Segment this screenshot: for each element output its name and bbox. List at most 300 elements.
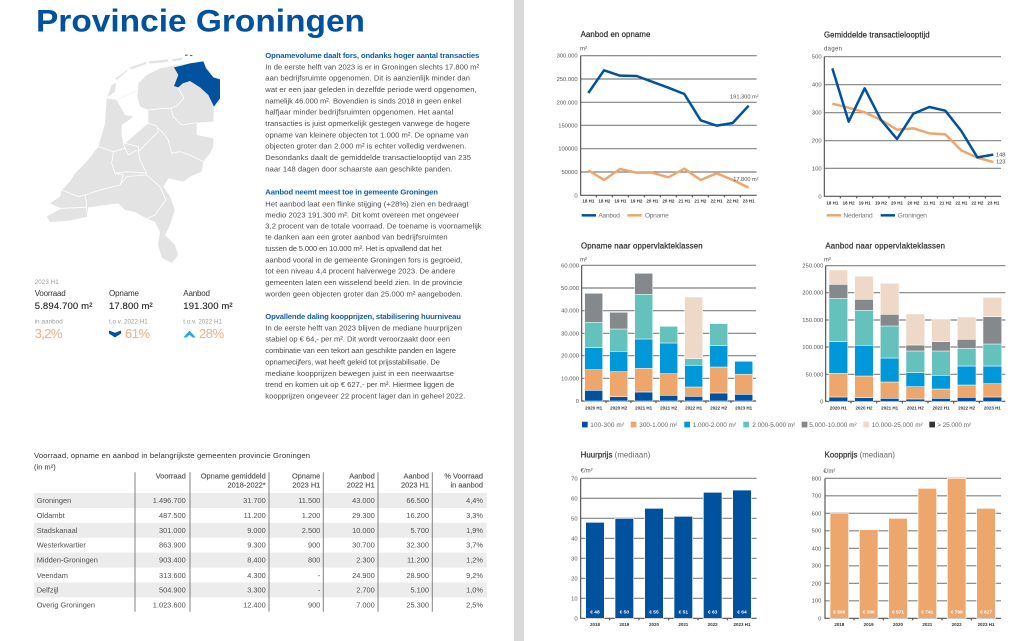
bar value labels: € 63 bbox=[708, 609, 718, 615]
row: Delfzijl bbox=[37, 586, 483, 595]
table header: 2023 H1 bbox=[401, 480, 429, 490]
map: national silhouette bbox=[47, 61, 220, 263]
bar value labels: € 598 bbox=[833, 609, 846, 615]
row: Westerkwartier bbox=[37, 541, 483, 550]
row: Overig Groningen: 25.300 bbox=[406, 601, 429, 610]
table header bbox=[156, 472, 483, 490]
row: Delfzijl: Delfzijl bbox=[37, 586, 59, 595]
y labels: 0 bbox=[820, 399, 824, 405]
section: aanbod: aanbod vooral in de gemeente Groningen fors is gegroeid, bbox=[265, 255, 462, 264]
kpi: opname: Opname bbox=[109, 289, 140, 298]
unit: €/m² bbox=[581, 468, 593, 474]
chart title: Opname naar oppervlakteklassen bbox=[581, 241, 703, 250]
x labels: 2019 bbox=[619, 622, 630, 627]
segment 1000-2000 bbox=[829, 342, 1002, 389]
x labels: 2021 bbox=[922, 622, 933, 627]
section: opnamevolume: In de eerste helft van 2023 is er in Groningen slechts 17.800 m² bbox=[265, 62, 479, 71]
section: aanbod bbox=[264, 188, 482, 299]
kpi: voorraad: 3,2% bbox=[35, 326, 63, 341]
row: Groningen: Groningen bbox=[37, 496, 71, 505]
section: opnamevolume: opname van kleinere objecten tot 1.000 m². De opname van bbox=[265, 130, 469, 139]
bars bbox=[829, 270, 1002, 401]
section: opnamevolume: naar 148 dagen door schaarste aan geschikte panden. bbox=[265, 164, 452, 173]
line: opname bbox=[588, 169, 749, 188]
row: Overig Groningen: 12.400 bbox=[243, 601, 266, 610]
legend: 5000-10000: 5.000-10.000 m² bbox=[809, 422, 857, 429]
x labels: 19 H2 bbox=[875, 200, 887, 205]
legend: 100-300: 100-300 m² bbox=[590, 422, 624, 429]
y labels: 50000 bbox=[561, 170, 578, 176]
row: Groningen: 66.500 bbox=[406, 496, 429, 505]
y labels: 40.000 bbox=[561, 309, 580, 315]
row: Oldambt: 16.200 bbox=[406, 511, 429, 520]
x labels: 19 H2 bbox=[630, 198, 643, 203]
map of the Netherlands bbox=[47, 54, 220, 263]
line: aanbod bbox=[588, 70, 749, 126]
unit: m² bbox=[824, 257, 831, 263]
y labels: 250.000 bbox=[557, 77, 578, 83]
kpi: opname: 61% bbox=[125, 326, 150, 341]
y labels: 500 bbox=[812, 55, 822, 61]
x labels: 2021 H2 bbox=[660, 406, 678, 411]
x labels bbox=[590, 622, 751, 627]
segment 300-1000 bbox=[829, 373, 1002, 399]
unit: m² bbox=[580, 257, 587, 263]
row: Westerkwartier: 9.300 bbox=[247, 541, 266, 550]
y labels: 200.000 bbox=[557, 100, 578, 106]
row: Stadskanaal: Stadskanaal bbox=[37, 526, 78, 535]
y labels: 700 bbox=[812, 494, 822, 500]
row: Oldambt: 29.300 bbox=[352, 511, 375, 520]
section: aanbod: Het aanbod laat een flinke stijging (+28%) zien en bedraagt bbox=[265, 199, 469, 208]
y labels: 0 bbox=[576, 399, 580, 405]
y labels: 150.000 bbox=[802, 318, 824, 324]
kpi: voorraad: 5.894.700 m² bbox=[35, 301, 92, 312]
line chart: gemiddelde transactielooptijd bbox=[812, 31, 1005, 219]
y labels bbox=[561, 263, 580, 405]
section: prijzen: Opvallende daling koopprijzen, stabilisering huurniveau bbox=[265, 312, 461, 321]
bar chart: koopprijs bbox=[812, 451, 1001, 627]
row: Oldambt: 1.200 bbox=[302, 511, 320, 520]
body text column bbox=[264, 51, 482, 400]
legend: 300-1000: 300-1.000 m² bbox=[639, 422, 677, 429]
x labels: 2020 bbox=[649, 622, 659, 627]
row: Veendam: 313.600 bbox=[159, 571, 186, 580]
y labels: 10 bbox=[571, 596, 578, 602]
y labels: 50 bbox=[571, 516, 578, 522]
unit: dagen bbox=[824, 46, 842, 52]
x labels: 2023 H1 bbox=[978, 622, 995, 627]
section: aanbod: te danken aan een groter aanbod van bedrijfsruimten bbox=[265, 233, 448, 242]
section: aanbod: tussen de 5.000 en 10.000 m². Het is opvallend dat het bbox=[265, 244, 442, 253]
bar value labels bbox=[833, 609, 992, 615]
row: Oldambt: 11.200 bbox=[244, 511, 266, 520]
segment 5000-10000 bbox=[829, 284, 1002, 351]
y labels: 20.000 bbox=[561, 354, 580, 360]
x labels: 22 H1 bbox=[711, 198, 723, 203]
row: Westerkwartier: 863.900 bbox=[159, 541, 186, 550]
section: prijzen: combinatie van een tekort aan geschikte panden en lagere bbox=[265, 346, 456, 355]
axes bbox=[581, 478, 757, 620]
segment 100-300 bbox=[585, 390, 753, 401]
x labels: 2021 H2 bbox=[907, 406, 924, 411]
y labels: 300.000 bbox=[557, 54, 578, 60]
bar value labels: € 48 bbox=[590, 609, 600, 615]
row: Midden-Groningen: 8.400 bbox=[247, 556, 266, 565]
section: aanbod: 3,2 procent van de totale voorraad. De toename is voornamelijk bbox=[265, 221, 482, 230]
table row stripes bbox=[34, 493, 487, 597]
bar value labels: € 64 bbox=[737, 609, 747, 615]
segment 10000-25000 bbox=[685, 297, 703, 359]
x labels: 20 H2 bbox=[907, 200, 920, 205]
kpi: aanbod: 28% bbox=[199, 326, 224, 341]
row: Oldambt: Oldambt bbox=[37, 511, 65, 520]
section: aanbod: gemeenten laten een wisselend beeld zien. In de provincie bbox=[265, 278, 462, 287]
x labels: 20 H1 bbox=[646, 198, 659, 203]
bars bbox=[830, 478, 995, 618]
table header: % Voorraad bbox=[444, 472, 483, 480]
x labels: 22 H2 bbox=[971, 200, 984, 205]
x labels: 2020 H1 bbox=[830, 406, 847, 411]
axes bbox=[825, 478, 1001, 620]
y labels: 60.000 bbox=[561, 263, 580, 269]
icon: chevron up bbox=[183, 330, 196, 338]
y labels: 0 bbox=[818, 194, 822, 200]
table bbox=[34, 451, 487, 612]
section: opnamevolume bbox=[264, 51, 479, 173]
grid lines bbox=[581, 56, 757, 172]
row: Veendam: 4.300 bbox=[247, 571, 266, 580]
y labels: 250.000 bbox=[802, 264, 824, 270]
bar value labels: € 571 bbox=[892, 609, 904, 615]
segment 100-300 bbox=[829, 397, 1002, 401]
section: aanbod: worden geen objecten groter dan 25.000 m² aangeboden. bbox=[264, 290, 463, 299]
y labels: 100.000 bbox=[802, 345, 824, 351]
kpi: aanbod bbox=[183, 289, 233, 341]
row: Oldambt bbox=[37, 511, 483, 520]
bar value labels: € 51 bbox=[679, 609, 688, 615]
period label: 2023 H1 bbox=[35, 279, 59, 286]
legend bbox=[827, 212, 927, 219]
table title: Voorraad, opname en aanbod in belangrijkste gemeenten provincie Groningen bbox=[34, 451, 310, 460]
row: Stadskanaal: 301.000 bbox=[159, 526, 186, 535]
table header: Aanbod bbox=[404, 472, 429, 480]
bar chart: huurprijs bbox=[571, 451, 757, 627]
x labels: 18 H2 bbox=[598, 198, 611, 203]
line: nederland bbox=[832, 104, 993, 162]
shared legend oppervlakteklassen bbox=[582, 422, 971, 429]
legend: Nederland bbox=[843, 212, 873, 219]
y labels: 400 bbox=[812, 83, 822, 89]
kpi: aanbod: Aanbod bbox=[183, 289, 210, 298]
section: opnamevolume: namelijk 46.000 m². Bovendien is sinds 2018 in geen enkel bbox=[265, 96, 462, 105]
table column rules bbox=[135, 472, 432, 612]
section: opnamevolume: Opnamevolume daalt fors, ondanks hoger aantal transacties bbox=[265, 51, 479, 60]
row: Delfzijl: 504.900 bbox=[159, 586, 186, 595]
legend: 2000-5000: 2.000-5.000 m² bbox=[752, 422, 795, 429]
row: Midden-Groningen: 11.200 bbox=[407, 556, 429, 565]
row: Overig Groningen: Overig Groningen bbox=[37, 601, 95, 610]
row: Veendam: 28.900 bbox=[406, 571, 429, 580]
y labels: 0 bbox=[574, 193, 578, 199]
y labels bbox=[557, 54, 578, 199]
value label groningen: 148 bbox=[996, 152, 1005, 158]
x labels: 23 H1 bbox=[743, 198, 755, 203]
axes bbox=[581, 56, 757, 197]
chart title: Huurprijs (mediaan) bbox=[581, 451, 651, 460]
chart title: Gemiddelde transactielooptijd bbox=[824, 31, 930, 40]
section: aanbod: Aanbod neemt meest toe in gemeente Groningen bbox=[265, 188, 438, 197]
section: prijzen: opnamecijfers, wat heeft geleid tot prijsstabilisatie. De bbox=[265, 358, 440, 367]
section: opnamevolume: Desondanks daalt de gemiddelde transactielooptijd van 235 bbox=[265, 153, 471, 162]
row: Westerkwartier: 3,7% bbox=[466, 541, 483, 550]
row: Stadskanaal: 9.000 bbox=[247, 526, 266, 535]
row: Overig Groningen: 1.023.600 bbox=[153, 601, 186, 610]
table header: Opname gemiddeld bbox=[201, 472, 266, 480]
x labels: 2020 H2 bbox=[610, 406, 628, 411]
y labels: 500 bbox=[812, 529, 822, 535]
map: province borders bbox=[62, 88, 203, 219]
kpi: aanbod: 191.300 m² bbox=[183, 301, 233, 312]
x labels: 21 H1 bbox=[678, 198, 691, 203]
x labels: 18 H1 bbox=[582, 198, 595, 203]
table header: Voorraad bbox=[156, 472, 186, 480]
legend: 1000-2000: 1.000-2.000 m² bbox=[693, 422, 736, 429]
section: prijzen: mediane koopprijzen bewegen juist in een neerwaartse bbox=[265, 369, 454, 378]
value label opname: 17.800 m² bbox=[733, 177, 759, 183]
x labels: 22 H1 bbox=[955, 200, 968, 205]
section: prijzen: trend en komen uit op € 627,- per m². Hiermee liggen de bbox=[265, 380, 454, 389]
legend: Aanbod bbox=[598, 212, 620, 219]
bar value labels bbox=[590, 609, 747, 615]
x labels: 2018 bbox=[590, 622, 600, 627]
x labels: 21 H2 bbox=[939, 200, 952, 205]
icon: chevron down bbox=[109, 330, 121, 338]
section: opnamevolume: transacties is juist opmerkelijk gestegen vanwege de hogere bbox=[265, 119, 470, 128]
bar value labels: € 55 bbox=[649, 609, 659, 615]
y labels: 100 bbox=[812, 599, 822, 605]
legend: above 25000: > 25.000 m² bbox=[937, 422, 971, 429]
row: Delfzijl: 5.100 bbox=[410, 586, 429, 595]
x labels: 21 H1 bbox=[923, 200, 936, 205]
legend: Groningen bbox=[898, 212, 927, 219]
chart title: Aanbod naar oppervlakteklassen bbox=[825, 241, 945, 250]
y labels bbox=[812, 55, 822, 200]
section: opnamevolume: wat er een jaar geleden in dezelfde periode werd opgenomen, bbox=[264, 85, 477, 94]
legend: Opname bbox=[645, 212, 669, 219]
x labels: 2022 H1 bbox=[685, 406, 703, 411]
kpi: opname bbox=[109, 289, 153, 341]
row: Overig Groningen: 7.000 bbox=[356, 601, 375, 610]
row: Stadskanaal bbox=[37, 526, 483, 535]
section: prijzen: In de eerste helft van 2023 blijven de mediane huurprijzen bbox=[265, 323, 462, 332]
y labels: 400 bbox=[812, 546, 822, 552]
row: Overig Groningen: 2,5% bbox=[466, 601, 483, 610]
x labels: 19 H1 bbox=[859, 200, 871, 205]
x labels: 2023 H1 bbox=[984, 406, 1001, 411]
x labels bbox=[582, 198, 755, 203]
kpi: opname: t.o.v. 2022 H1 bbox=[109, 318, 148, 326]
line chart: aanbod en opname bbox=[557, 30, 759, 219]
x labels: 2021 bbox=[678, 622, 689, 627]
y labels bbox=[571, 476, 578, 622]
x labels: 18 H1 bbox=[826, 200, 839, 205]
section: opnamevolume: objecten groter dan 2.000 m² is echter volledig verdwenen. bbox=[265, 142, 466, 151]
bars bbox=[585, 273, 753, 401]
grid lines bbox=[826, 266, 1005, 374]
section: prijzen: stabiel op € 64,- per m². Dit wordt veroorzaakt door een bbox=[265, 335, 450, 344]
section: opnamevolume: aan bedrijfsruimte opgenomen. Dit is aanzienlijk minder dan bbox=[265, 74, 470, 83]
row: Oldambt: 3,3% bbox=[466, 511, 483, 520]
row: Oldambt: 487.500 bbox=[159, 511, 186, 520]
row: Stadskanaal: 2.500 bbox=[302, 526, 320, 535]
y labels: 0 bbox=[818, 616, 822, 622]
x labels: 2018 bbox=[834, 622, 845, 627]
bar value labels: € 506 bbox=[863, 609, 875, 615]
bar value labels: € 50 bbox=[620, 609, 629, 615]
row: Veendam: 9,2% bbox=[466, 571, 483, 580]
x labels: 2022 bbox=[952, 622, 962, 627]
kpi: voorraad: in aanbod bbox=[35, 318, 63, 326]
y labels: 200.000 bbox=[802, 291, 824, 297]
segment 10000-25000 bbox=[829, 270, 1002, 345]
title: Provincie Groningen bbox=[36, 3, 365, 39]
table header: Aanbod bbox=[349, 472, 375, 480]
axes bbox=[582, 265, 756, 403]
stacked bar chart: aanbod naar oppervlakteklassen bbox=[802, 241, 1005, 411]
y labels: 30 bbox=[571, 556, 578, 562]
y labels: 100 bbox=[812, 166, 822, 172]
map: afsluitdijk bbox=[117, 90, 137, 100]
row: Midden-Groningen: 2.300 bbox=[356, 556, 375, 565]
x labels: 18 H2 bbox=[843, 200, 855, 205]
kpi: aanbod: t.o.v. 2022 H1 bbox=[183, 318, 223, 326]
y labels: 200 bbox=[812, 581, 822, 587]
row: Delfzijl: 3.300 bbox=[247, 586, 266, 595]
row: Overig Groningen: 900 bbox=[308, 601, 320, 610]
x labels: 2021 H1 bbox=[635, 406, 653, 411]
row: Groningen: 11.500 bbox=[298, 496, 320, 505]
segment 5000-10000 bbox=[585, 273, 653, 329]
x labels: 2023 H1 bbox=[734, 622, 751, 627]
x labels: 2022 H1 bbox=[933, 406, 950, 411]
grid lines bbox=[582, 265, 756, 378]
row: Groningen bbox=[37, 496, 483, 505]
value label aanbod: 191.300 m² bbox=[730, 94, 759, 100]
section: aanbod: tot een niveau 4,4 procent halverwege 2023. De andere bbox=[265, 267, 455, 276]
x labels: 2020 H2 bbox=[856, 406, 873, 411]
row: Groningen: 1.496.700 bbox=[153, 496, 186, 505]
row: Veendam: Veendam bbox=[37, 571, 68, 580]
y labels: 10.000 bbox=[561, 376, 580, 382]
row: Midden-Groningen: 800 bbox=[308, 556, 320, 565]
row: Westerkwartier: Westerkwartier bbox=[37, 541, 86, 550]
x labels: 2020 H1 bbox=[585, 406, 603, 411]
map: Groningen highlighted bbox=[174, 54, 220, 107]
row: Delfzijl: 1,0% bbox=[466, 586, 483, 595]
axes bbox=[824, 57, 1001, 198]
row: Delfzijl: 2.700 bbox=[356, 586, 375, 595]
row: Groningen: 31.700 bbox=[243, 496, 266, 505]
row: Midden-Groningen: 903.400 bbox=[159, 556, 186, 565]
kpi: voorraad bbox=[35, 289, 92, 341]
chart title: Koopprijs (mediaan) bbox=[825, 451, 895, 460]
x labels: 22 H2 bbox=[727, 198, 739, 203]
x labels: 23 H1 bbox=[987, 200, 1000, 205]
y labels: 60 bbox=[571, 496, 578, 502]
grid lines bbox=[824, 57, 1001, 168]
section: prijzen bbox=[265, 312, 465, 400]
legend bbox=[582, 212, 669, 219]
row: Overig Groningen bbox=[37, 601, 483, 610]
y labels: 600 bbox=[812, 511, 822, 517]
y labels: 50.000 bbox=[561, 286, 580, 292]
grid lines bbox=[825, 478, 1001, 601]
segment 2000-5000 bbox=[585, 294, 728, 365]
y labels: 200 bbox=[812, 139, 822, 145]
row: Midden-Groningen: 1,2% bbox=[466, 556, 483, 565]
x labels: 2022 bbox=[708, 622, 718, 627]
y labels bbox=[812, 476, 822, 622]
grid lines bbox=[581, 478, 757, 598]
table header: in aanbod bbox=[451, 480, 483, 490]
x labels: 20 H2 bbox=[662, 198, 675, 203]
row: Veendam bbox=[37, 571, 483, 580]
table header: 2018-2022* bbox=[227, 480, 266, 490]
y labels: 100000 bbox=[558, 147, 578, 153]
y labels: 50.000 bbox=[806, 372, 824, 378]
key figures bbox=[35, 279, 233, 341]
row: Veendam: - bbox=[318, 571, 321, 580]
y labels bbox=[802, 264, 824, 405]
bar value labels: € 741 bbox=[921, 609, 934, 615]
row: Westerkwartier: 32.300 bbox=[406, 541, 429, 550]
y labels: 150000 bbox=[558, 123, 578, 129]
x labels bbox=[834, 622, 995, 627]
x labels bbox=[830, 406, 1001, 411]
row: Groningen: 43.000 bbox=[352, 496, 375, 505]
stacked bar chart: opname naar oppervlakteklassen bbox=[561, 241, 756, 411]
section: opnamevolume: halfjaar minder bedrijfsruimten opgenomen. Het aantal bbox=[265, 108, 454, 117]
kpi: opname: 17.800 m² bbox=[109, 301, 153, 312]
y labels: 0 bbox=[574, 616, 578, 622]
y labels: 300 bbox=[812, 564, 822, 570]
bar value labels: € 627 bbox=[980, 609, 992, 615]
segment 300-1000 bbox=[585, 367, 753, 397]
row: Westerkwartier: 900 bbox=[308, 541, 320, 550]
y labels: 800 bbox=[812, 476, 822, 482]
map: Wadden islands bbox=[107, 57, 183, 97]
x labels: 21 H2 bbox=[694, 198, 707, 203]
x labels: 2019 bbox=[864, 622, 874, 627]
y labels: 30.000 bbox=[561, 331, 580, 337]
row: Stadskanaal: 1,9% bbox=[466, 526, 483, 535]
x labels: 20 H1 bbox=[891, 200, 903, 205]
row: Stadskanaal: 5.700 bbox=[410, 526, 429, 535]
x labels: 2023 H1 bbox=[735, 406, 753, 411]
section: aanbod: medio 2023 191.300 m². Dit komt overeen met ongeveer bbox=[265, 211, 459, 220]
segment 2000-5000 bbox=[829, 298, 1002, 375]
row: Midden-Groningen: Midden-Groningen bbox=[37, 556, 98, 565]
value label nederland: 123 bbox=[996, 160, 1005, 166]
x labels: 2021 H1 bbox=[881, 406, 899, 411]
segment 1000-2000 bbox=[585, 339, 753, 387]
axes bbox=[826, 266, 1005, 403]
table unit: (in m²) bbox=[34, 462, 56, 472]
x labels bbox=[826, 200, 1000, 205]
y labels: 20 bbox=[571, 576, 578, 582]
x labels: 2022 H2 bbox=[710, 406, 728, 411]
